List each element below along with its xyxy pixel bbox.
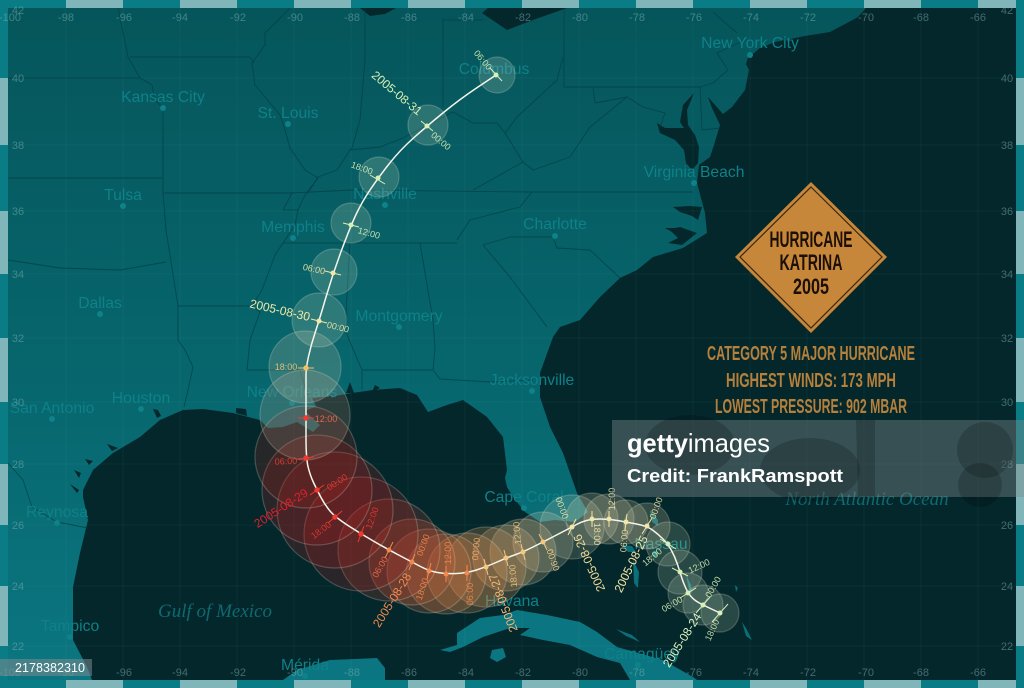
storm: date labels: 2005-08-25 <box>611 533 651 595</box>
axis: longitude and latitude labels: -70 <box>858 12 874 24</box>
axis: longitude and latitude labels: -86 <box>401 667 417 679</box>
axis: longitude and latitude labels: -80 <box>572 12 588 24</box>
map: city labels: Montgomery <box>355 308 443 325</box>
axis: longitude and latitude labels: -76 <box>686 667 702 679</box>
map: city labels: New Orleans <box>247 384 337 401</box>
map: city labels: Charlotte <box>523 216 587 233</box>
axis: longitude and latitude labels: 22 <box>12 641 24 653</box>
map: city labels: Jacksonville <box>490 372 575 389</box>
map: city labels: Nassau <box>634 536 688 553</box>
map: Isle of Youth <box>490 648 506 662</box>
storm: hour labels: 12:00 <box>357 225 381 241</box>
axis: longitude and latitude labels: 38 <box>12 140 24 152</box>
axis: longitude and latitude labels: 28 <box>12 459 24 471</box>
stats: category, winds and pressure <box>707 343 915 418</box>
map: city labels: Memphis <box>261 219 325 236</box>
storm: hour labels: 18:00 <box>507 564 519 588</box>
map: state and country borders <box>8 8 745 528</box>
storm: hour labels: 18:00 <box>414 577 430 601</box>
axis: longitude and latitude labels: -74 <box>743 12 759 24</box>
storm: hour labels: 06:00 <box>274 456 298 467</box>
axis: longitude and latitude labels: -82 <box>515 12 531 24</box>
axis: longitude and latitude labels: -90 <box>287 12 303 24</box>
storm: hour labels: 00:00 <box>429 130 453 152</box>
storm: hour labels: 06:00 <box>370 555 390 579</box>
sign: title text <box>770 227 852 299</box>
storm: hour labels: 12:00 <box>607 488 617 510</box>
axis: longitude and latitude labels: -98 <box>58 12 74 24</box>
storm: hour labels: 06:00 <box>302 262 326 276</box>
axis: longitude and latitude labels: -68 <box>913 12 929 24</box>
map: Yucatan peninsula <box>283 658 385 680</box>
watermark: getty images logo: gettyimages <box>627 428 770 458</box>
storm: track line <box>306 75 720 613</box>
storm: hour labels: 18:00 <box>350 160 374 177</box>
axis: longitude and latitude labels: -72 <box>800 667 816 679</box>
axis: longitude and latitude labels: -88 <box>344 12 360 24</box>
map: city labels: Camagüey <box>604 646 680 663</box>
storm: date labels: 2005-08-26 <box>570 532 608 594</box>
map: city labels: Tampico <box>41 618 99 635</box>
map: city labels: Reynosa <box>26 504 88 521</box>
map: city labels: New York City <box>701 35 799 52</box>
axis: longitude and latitude labels: -82 <box>515 667 531 679</box>
axis: longitude and latitude labels: -70 <box>858 667 874 679</box>
storm: hour labels: 00:00 <box>326 320 350 335</box>
axis: longitude and latitude labels: 34 <box>12 269 24 281</box>
axis: longitude and latitude labels: 40 <box>12 73 24 85</box>
axis: longitude and latitude labels: -86 <box>401 12 417 24</box>
map: North Atlantic Ocean label: North Atlantic Ocean <box>784 489 949 510</box>
watermark: image id tag <box>0 659 92 676</box>
axis: longitude and latitude labels: 42 <box>1001 5 1013 17</box>
sign: hurricane name diamond <box>735 182 887 333</box>
axis: longitude and latitude labels: -74 <box>743 667 759 679</box>
watermark: image id tag: 2178382310 <box>15 661 85 675</box>
storm: hour labels: 00:00 <box>703 575 723 599</box>
storm: hour labels: 00:00 <box>325 472 349 492</box>
map: city labels: St. Louis <box>257 105 319 122</box>
watermark: credit band <box>612 415 1024 507</box>
axis: longitude and latitude labels: -96 <box>116 12 132 24</box>
map: city labels: Nashville <box>353 186 417 203</box>
storm: hour labels: 12:00 <box>687 557 711 575</box>
axis: longitude and latitude labels: 26 <box>1001 520 1013 532</box>
stats: category, winds and pressure: HIGHEST WINDS: 173 MPH <box>726 370 896 392</box>
sign: title text: KATRINA <box>780 250 843 275</box>
axis: longitude and latitude labels: -98 <box>58 667 74 679</box>
axis: longitude and latitude labels: 38 <box>1001 140 1013 152</box>
axis: longitude and latitude labels: -92 <box>230 667 246 679</box>
storm: hour labels: 12:00 <box>443 542 453 564</box>
map: city labels: Kansas City <box>121 89 205 106</box>
storm: hour labels: 06:00 <box>465 583 475 605</box>
watermark: credit text: Credit: FrankRamspott <box>627 466 843 486</box>
axis: longitude and latitude labels: -66 <box>970 12 986 24</box>
storm: hour labels: 06:00 <box>472 48 494 72</box>
sign: title text: 2005 <box>793 274 829 299</box>
sign: title text: HURRICANE <box>770 227 852 252</box>
map: city labels: Cape Coral <box>484 489 564 506</box>
storm: hour labels: 18:00 <box>275 362 297 372</box>
storm: hour labels <box>274 48 723 642</box>
axis: longitude and latitude labels: 24 <box>12 581 24 593</box>
storm: date labels: 2005-08-30 <box>248 296 312 324</box>
storm: hour labels: 00:00 <box>470 537 482 561</box>
map: Cuba <box>440 610 697 680</box>
axis: longitude and latitude labels: -92 <box>230 12 246 24</box>
axis: longitude and latitude labels: -78 <box>629 12 645 24</box>
axis: longitude and latitude labels: -72 <box>800 12 816 24</box>
storm: hour labels: 00:00 <box>554 496 571 520</box>
axis: longitude and latitude labels: -84 <box>458 667 474 679</box>
axis: longitude and latitude labels: 26 <box>12 520 24 532</box>
storm: hour labels: 12:00 <box>364 506 381 530</box>
storm: track point markers and ticks <box>298 68 728 622</box>
map: Gulf of Mexico label: Gulf of Mexico <box>158 601 272 622</box>
map: city labels: Mérida <box>281 657 329 674</box>
axis: longitude and latitude labels: 40 <box>1001 73 1013 85</box>
axis: longitude and latitude labels: 42 <box>12 5 24 17</box>
axis: longitude and latitude labels: 36 <box>1001 206 1013 218</box>
map: city labels: Virginia Beach <box>644 164 744 181</box>
map: city labels: San Antonio <box>10 400 95 417</box>
axis: longitude and latitude labels: -94 <box>172 12 188 24</box>
storm: hour labels: 06:00 <box>618 529 630 553</box>
axis: longitude and latitude labels: -84 <box>458 12 474 24</box>
axis: longitude and latitude labels: -88 <box>344 667 360 679</box>
map: city labels: Houston <box>112 390 170 407</box>
axis: longitude and latitude labels: 34 <box>1001 269 1013 281</box>
map: city labels: Dallas <box>78 295 122 312</box>
storm: hour labels: 18:00 <box>592 523 602 545</box>
storm: date labels: 2005-08-27 <box>486 571 521 634</box>
axis: longitude and latitude labels: -66 <box>970 667 986 679</box>
storm: date labels: 2005-08-24 <box>660 610 705 670</box>
storm: hour labels: 18:00 <box>703 618 721 642</box>
storm: date labels: 2005-08-29 <box>252 485 311 531</box>
map: city labels <box>10 35 799 679</box>
axis: longitude and latitude labels: 32 <box>1001 333 1013 345</box>
map: city labels: Tulsa <box>104 187 142 204</box>
storm: hour labels: 18:00 <box>309 519 333 541</box>
axis: longitude and latitude labels: 28 <box>1001 459 1013 471</box>
storm: date labels: 2005-08-28 <box>370 570 415 630</box>
stats: category, winds and pressure: LOWEST PRESSURE: 902 MBAR <box>715 396 907 418</box>
axis: longitude and latitude labels: -78 <box>629 667 645 679</box>
storm: hour labels: 12:00 <box>315 414 337 424</box>
axis: longitude and latitude labels: 24 <box>1001 581 1013 593</box>
map: city labels: Havana <box>485 593 539 610</box>
storm: hour labels: 18:00 <box>640 546 664 568</box>
axis: longitude and latitude labels: 30 <box>1001 397 1013 409</box>
map: city labels: Columbus <box>459 61 529 78</box>
storm: date labels <box>248 68 705 670</box>
axis: longitude and latitude labels: -96 <box>116 667 132 679</box>
storm: hour labels: 06:00 <box>660 594 684 614</box>
axis: longitude and latitude labels: -94 <box>172 667 188 679</box>
axis: longitude and latitude labels: 30 <box>12 397 24 409</box>
storm: hour labels: 00:00 <box>648 496 665 520</box>
axis: longitude and latitude labels: -90 <box>287 667 303 679</box>
axis: longitude and latitude labels: 22 <box>1001 641 1013 653</box>
storm: wind radius circles <box>255 57 739 632</box>
axis: longitude and latitude labels: -68 <box>913 667 929 679</box>
axis: longitude and latitude labels: 32 <box>12 333 24 345</box>
axis: longitude and latitude labels: -80 <box>572 667 588 679</box>
axis: longitude and latitude labels: -76 <box>686 12 702 24</box>
storm: date labels: 2005-08-31 <box>369 68 425 118</box>
storm: hour labels: 12:00 <box>511 521 523 545</box>
map: bays and inland water <box>70 8 702 493</box>
storm: hour labels: 06:00 <box>545 548 562 572</box>
axis: longitude and latitude labels: 36 <box>12 206 24 218</box>
map: Bahamas islands <box>616 510 752 642</box>
storm: hour labels: 00:00 <box>415 533 432 557</box>
